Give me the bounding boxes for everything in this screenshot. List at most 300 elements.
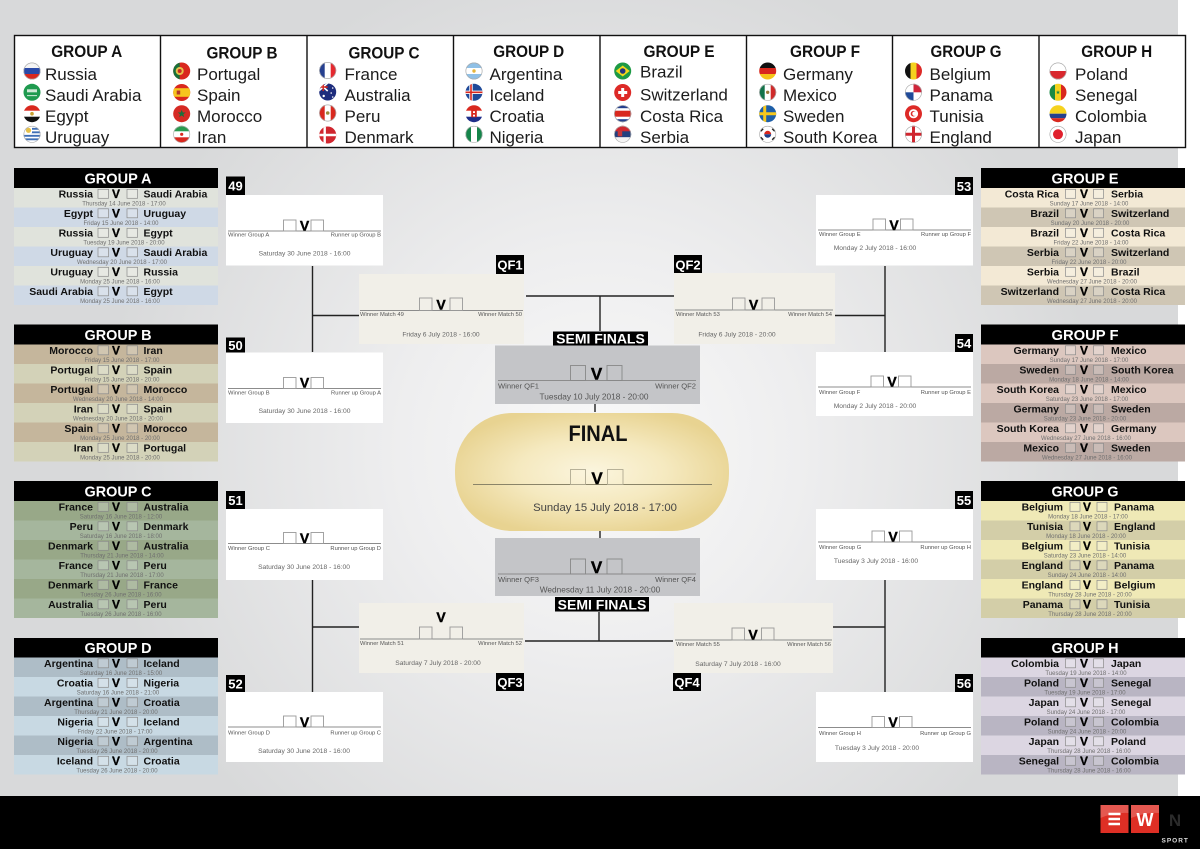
fixture: Peru v Denmark: Denmark: [144, 521, 189, 533]
panel: Group H fixtures: GROUP H: [1052, 640, 1118, 657]
semi final 2: [495, 538, 700, 612]
fixture: Colombia v Japan: Colombia: [1011, 658, 1059, 670]
fixture: Spain v Morocco: V: [112, 421, 120, 435]
fixture: Belgium v Tunisia: V: [1083, 539, 1091, 553]
logo: EWN Sport: W: [1136, 810, 1154, 830]
fixture: Uruguay v Saudi Arabia: V: [112, 245, 120, 259]
fixture: Portugal v Morocco: [14, 382, 218, 403]
fixture: Russia v Egypt: V: [112, 226, 120, 240]
fixture: Iran v Portugal: Monday 25 June 2018 - 20:00: [80, 456, 161, 462]
final: Sunday 15 July 2018 - 17:00: [533, 502, 677, 514]
fixture: Poland v Senegal: Poland: [1024, 678, 1059, 690]
fixture: Panama v Tunisia: V: [1083, 597, 1091, 611]
fixture: Brazil v Switzerland: Sunday 20 June 2018 - 20:00: [1051, 221, 1130, 227]
panel: Group C fixtures: [14, 481, 218, 618]
fixture: Costa Rica v Serbia: Sunday 17 June 2018 - 14:00: [1050, 202, 1129, 208]
fixture: Japan v Poland: V: [1080, 734, 1088, 748]
match 52: Winner Group D: [228, 730, 270, 736]
group list: Group H: GROUP H: [1081, 42, 1152, 61]
fixture: Japan v Senegal: Sunday 24 June 2018 - 17:00: [1047, 710, 1126, 716]
quarter final 4: Winner Match 55: [676, 642, 720, 648]
quarter final 4: Saturday 7 July 2018 - 16:00: [695, 661, 781, 668]
fixture: England v Belgium: Thursday 28 June 2018 - 20:00: [1048, 592, 1132, 598]
country: Senegal: Senegal: [1075, 86, 1137, 105]
fixture: Iceland v Croatia: Tuesday 26 June 2018 - 20:00: [76, 768, 158, 774]
fixture: Serbia v Switzerland: Serbia: [1027, 247, 1059, 259]
semi final 1: Winner QF2: [655, 382, 696, 390]
match 49: V: [300, 218, 310, 234]
fixture: France v Australia: V: [112, 500, 120, 514]
fixture: Serbia v Switzerland: Switzerland: [1111, 247, 1169, 259]
fixture: Australia v Peru: [14, 597, 218, 618]
fixture: France v Australia: Saturday 16 June 2018 - 12:00: [80, 514, 163, 520]
quarter final 2: Winner Match 53: [676, 312, 720, 318]
fixture: Germany v Sweden: Sweden: [1111, 404, 1151, 416]
fixture: Iceland v Croatia: V: [112, 754, 120, 768]
match 50: [226, 338, 383, 423]
fixture: Spain v Morocco: [14, 421, 218, 442]
fixture: Colombia v Japan: Japan: [1111, 658, 1141, 670]
fixture: Nigeria v Argentina: [14, 734, 218, 755]
group list: Group C: [319, 43, 420, 147]
country: Peru: Peru: [344, 107, 380, 126]
panel: Group F fixtures: GROUP F: [1052, 327, 1118, 344]
country: Brazil: Brazil: [640, 62, 683, 82]
match 52: 52: [228, 676, 243, 692]
fixture: Argentina v Iceland: [14, 656, 218, 677]
fixture: Japan v Poland: [981, 734, 1185, 755]
fixture: Serbia v Brazil: Wednesday 27 June 2018 - 20:00: [1047, 280, 1138, 286]
fixture: Argentina v Croatia: V: [112, 695, 120, 709]
fixture: Russia v Egypt: [14, 226, 218, 246]
panel: Group F fixtures: [981, 324, 1185, 462]
country: Denmark: Denmark: [344, 128, 414, 147]
match 49: Winner Group A: [228, 232, 269, 238]
fixture: Senegal v Colombia: Colombia: [1111, 756, 1159, 768]
quarter final 3: QF3: [497, 675, 523, 690]
fixture: Argentina v Croatia: Croatia: [144, 697, 180, 709]
fixture: Brazil v Switzerland: Brazil: [1030, 208, 1059, 220]
final: [455, 413, 729, 531]
fixture: Sweden v South Korea: Sweden: [1019, 364, 1059, 376]
panel: Group D fixtures: GROUP D: [84, 640, 152, 657]
final: FINAL: [568, 421, 628, 446]
match 55: Runner up Group H: [920, 545, 971, 551]
fixture: Iceland v Croatia: Croatia: [144, 756, 180, 768]
quarter final 2: V: [749, 296, 759, 312]
fixture: South Korea v Germany: South Korea: [997, 423, 1059, 435]
country: Russia: Russia: [45, 65, 98, 84]
fixture: Russia v Saudi Arabia: Saudi Arabia: [144, 188, 207, 200]
country: Poland: Poland: [1075, 65, 1128, 84]
quarter final 4: QF4: [674, 675, 700, 690]
group list: Group F: GROUP F: [790, 42, 860, 61]
fixture: Uruguay v Russia: Uruguay: [50, 266, 93, 278]
panel: Group A fixtures: GROUP A: [84, 170, 152, 188]
group list: Group F: [759, 42, 878, 147]
fixture: Portugal v Morocco: Wednesday 20 June 2018 - 14:00: [73, 397, 164, 403]
semi final 2: SEMI FINALS: [558, 596, 646, 612]
fixture: Nigeria v Iceland: Friday 22 June 2018 - 17:00: [77, 730, 153, 736]
fixture: Argentina v Croatia: Argentina: [44, 697, 93, 709]
fixture: South Korea v Mexico: [981, 382, 1185, 403]
fixture: Belgium v Panama: Panama: [1114, 502, 1154, 514]
semi final 2: V: [591, 558, 603, 577]
fixture: Mexico v Sweden: V: [1080, 441, 1088, 455]
fixture: Denmark v France: Tuesday 26 June 2018 - 16:00: [80, 592, 162, 598]
fixture: Belgium v Panama: V: [1083, 500, 1091, 514]
fixture: Australia v Peru: V: [112, 597, 120, 611]
match 52: Runner up Group C: [330, 730, 381, 736]
match 51: Winner Group C: [228, 546, 270, 552]
quarter final 1: Winner Match 49: [360, 312, 404, 318]
semi final 2: Winner QF4: [655, 575, 696, 584]
fixture: Senegal v Colombia: Senegal: [1019, 756, 1059, 768]
fixture: Peru v Denmark: Saturday 16 June 2018 - 18:00: [80, 534, 163, 540]
panel: Group E fixtures: GROUP E: [1052, 170, 1118, 188]
panel: Group C fixtures: GROUP C: [84, 484, 152, 500]
fixture: Serbia v Switzerland: V: [1080, 245, 1088, 259]
quarter final 4: Winner Match 56: [787, 642, 831, 648]
fixture: Mexico v Sweden: Mexico: [1023, 442, 1059, 454]
group list: Group G: GROUP G: [930, 42, 1002, 61]
quarter final 1: [359, 255, 524, 344]
country: Tunisia: Tunisia: [930, 107, 984, 126]
fixture: Portugal v Spain: [14, 363, 218, 384]
fixture: Russia v Saudi Arabia: Thursday 14 June 2018 - 17:00: [82, 202, 166, 208]
fixture: Costa Rica v Serbia: Costa Rica: [1005, 188, 1059, 200]
fixture: Denmark v France: [14, 578, 218, 598]
fixture: Switzerland v Costa Rica: [981, 284, 1185, 305]
fixture: France v Australia: [14, 500, 218, 520]
panel: Group D fixtures: [14, 638, 218, 774]
fixture: Belgium v Tunisia: Saturday 23 June 2018 - 14:00: [1044, 554, 1127, 560]
fixture: Japan v Poland: Thursday 28 June 2018 - 16:00: [1047, 749, 1131, 755]
fixture: Costa Rica v Serbia: Serbia: [1111, 188, 1143, 200]
quarter final 2: [674, 255, 835, 344]
fixture: Saudi Arabia v Egypt: [14, 284, 218, 305]
fixture: Serbia v Switzerland: Friday 22 June 2018 - 20:00: [1051, 260, 1127, 266]
fixture: England v Belgium: England: [1022, 580, 1063, 592]
fixture: Argentina v Croatia: [14, 695, 218, 716]
fixture: Uruguay v Saudi Arabia: Uruguay: [50, 247, 93, 259]
logo: EWN Sport: N: [1169, 811, 1181, 830]
fixture: Panama v Tunisia: Thursday 28 June 2018 - 20:00: [1048, 612, 1132, 618]
fixture: Belgium v Tunisia: [981, 539, 1185, 560]
fixture: France v Australia: France: [59, 502, 93, 514]
fixture: England v Belgium: [981, 578, 1185, 598]
match 51: Runner up Group D: [330, 546, 381, 552]
fixture: Germany v Mexico: Sunday 17 June 2018 - 17:00: [1050, 358, 1129, 364]
fixture: Iceland v Croatia: [14, 754, 218, 774]
fixture: Sweden v South Korea: Monday 18 June 2018 - 14:00: [1049, 378, 1130, 384]
country: Panama: Panama: [930, 86, 993, 105]
fixture: Uruguay v Russia: [14, 265, 218, 286]
fixture: Spain v Morocco: Monday 25 June 2018 - 20:00: [80, 436, 161, 442]
fixture: Serbia v Switzerland: [981, 245, 1185, 266]
fixture: Tunisia v England: V: [1083, 519, 1091, 533]
country: England: England: [930, 128, 992, 147]
fixture: Germany v Mexico: V: [1080, 343, 1088, 357]
fixture: Brazil v Costa Rica: Brazil: [1030, 228, 1059, 240]
fixture: Panama v Tunisia: [981, 597, 1185, 618]
fixture: Nigeria v Iceland: Nigeria: [57, 716, 93, 728]
group list: Group D: [465, 42, 564, 147]
fixture: England v Belgium: Belgium: [1114, 580, 1155, 592]
group list: Group G: [904, 42, 1002, 147]
fixture: Uruguay v Russia: Monday 25 June 2018 - 16:00: [80, 280, 161, 286]
fixture: Russia v Egypt: Russia: [59, 228, 93, 240]
fixture: Tunisia v England: Tunisia: [1027, 521, 1063, 533]
logo: EWN Sport: [1100, 805, 1189, 844]
fixture: Argentina v Croatia: Thursday 21 June 2018 - 20:00: [74, 710, 158, 716]
fixture: Japan v Senegal: [981, 695, 1185, 716]
fixture: Iran v Spain: Wednesday 20 June 2018 - 20:00: [73, 416, 164, 422]
fixture: Argentina v Iceland: Saturday 16 June 2018 - 15:00: [80, 671, 163, 677]
fixture: Egypt v Uruguay: Egypt: [64, 208, 93, 220]
fixture: Iran v Spain: V: [112, 402, 120, 416]
fixture: Saudi Arabia v Egypt: Saudi Arabia: [29, 286, 93, 298]
fixture: Uruguay v Saudi Arabia: [14, 245, 218, 266]
quarter final 3: Winner Match 51: [360, 641, 404, 647]
fixture: Poland v Colombia: Colombia: [1111, 716, 1159, 728]
semi final 1: Winner QF1: [498, 382, 539, 390]
group list: Group C: GROUP C: [348, 43, 420, 62]
fixture: Portugal v Spain: Spain: [144, 364, 172, 376]
fixture: Colombia v Japan: V: [1080, 656, 1088, 670]
final: V: [591, 469, 603, 488]
fixture: Nigeria v Argentina: V: [112, 734, 120, 748]
match 54: Monday 2 July 2018 - 20:00: [834, 403, 917, 410]
fixture: Brazil v Switzerland: V: [1080, 206, 1088, 220]
country: Belgium: Belgium: [930, 65, 991, 84]
fixture: Belgium v Tunisia: Belgium: [1022, 540, 1063, 552]
fixture: Iran v Portugal: Portugal: [144, 442, 186, 454]
match 52: V: [300, 714, 310, 730]
fixture: Belgium v Tunisia: Tunisia: [1114, 540, 1150, 552]
country: Sweden: Sweden: [783, 107, 844, 126]
match 50: V: [300, 374, 310, 390]
match 53: 53: [957, 179, 971, 194]
quarter final 1: Friday 6 July 2018 - 16:00: [402, 332, 480, 338]
fixture: Senegal v Colombia: V: [1080, 754, 1088, 768]
fixture: Peru v Denmark: Peru: [70, 521, 93, 533]
fixture: Sweden v South Korea: V: [1080, 363, 1088, 377]
semi final 2: Winner QF3: [498, 575, 539, 584]
fixture: Iran v Spain: Spain: [144, 404, 172, 416]
fixture: South Korea v Germany: Wednesday 27 June 2018 - 16:00: [1041, 436, 1132, 442]
fixture: Belgium v Panama: [981, 500, 1185, 520]
match 49: 49: [228, 178, 243, 194]
fixture: Croatia v Nigeria: Croatia: [57, 678, 93, 690]
fixture: Russia v Egypt: Tuesday 19 June 2018 - 20:00: [83, 240, 165, 246]
country: Iran: Iran: [197, 128, 226, 147]
match 51: V: [300, 530, 310, 546]
fixture: Russia v Saudi Arabia: [14, 187, 218, 208]
fixture: Panama v Tunisia: Tunisia: [1114, 599, 1150, 611]
fixture: Denmark v France: Denmark: [48, 580, 93, 592]
fixture: Senegal v Colombia: Thursday 28 June 2018 - 16:00: [1047, 768, 1131, 774]
fixture: Portugal v Spain: V: [112, 363, 120, 377]
fixture: Costa Rica v Serbia: [981, 187, 1185, 208]
quarter final 1: V: [436, 296, 446, 312]
fixture: Japan v Poland: Japan: [1029, 736, 1059, 748]
footer bar: [0, 796, 1200, 849]
match 55: Winner Group G: [819, 545, 862, 551]
fixture: Russia v Egypt: Egypt: [144, 228, 173, 240]
logo: EWN Sport: SPORT: [1162, 838, 1189, 844]
match 54: [816, 334, 973, 416]
fixture: South Korea v Mexico: V: [1080, 382, 1088, 396]
quarter final 3: Saturday 7 July 2018 - 20:00: [395, 660, 481, 667]
fixture: Serbia v Brazil: [981, 265, 1185, 286]
fixture: Brazil v Switzerland: Switzerland: [1111, 208, 1169, 220]
fixture: South Korea v Germany: Germany: [1111, 423, 1157, 435]
fixture: Mexico v Sweden: Wednesday 27 June 2018 - 16:00: [1042, 456, 1133, 462]
fixture: Serbia v Brazil: V: [1080, 265, 1088, 279]
country: Saudi Arabia: Saudi Arabia: [45, 86, 142, 105]
fixture: Egypt v Uruguay: Friday 15 June 2018 - 14:00: [83, 221, 159, 227]
country: Spain: Spain: [197, 86, 240, 105]
semi final 2: Wednesday 11 July 2018 - 20:00: [540, 584, 661, 594]
fixture: Croatia v Nigeria: Nigeria: [144, 678, 179, 690]
fixture: Nigeria v Argentina: Nigeria: [57, 736, 93, 748]
fixture: France v Peru: Peru: [144, 560, 167, 572]
fixture: Denmark v Australia: Thursday 21 June 2018 - 14:00: [80, 554, 164, 560]
fixture: Colombia v Japan: [981, 656, 1185, 677]
fixture: Brazil v Costa Rica: Costa Rica: [1111, 228, 1165, 240]
country: Mexico: Mexico: [783, 86, 837, 105]
fixture: England v Belgium: V: [1083, 578, 1091, 592]
fixture: Tunisia v England: England: [1114, 521, 1155, 533]
country: Egypt: Egypt: [45, 107, 89, 126]
fixture: France v Peru: V: [112, 558, 120, 572]
fixture: Germany v Sweden: [981, 402, 1185, 422]
fixture: Croatia v Nigeria: [14, 676, 218, 696]
fixture: Denmark v Australia: [14, 539, 218, 560]
quarter final 3: V: [436, 609, 446, 625]
fixture: France v Peru: [14, 558, 218, 579]
fixture: Australia v Peru: Peru: [144, 599, 167, 611]
fixture: Saudi Arabia v Egypt: Monday 25 June 2018 - 16:00: [80, 299, 161, 305]
fixture: Nigeria v Iceland: [14, 715, 218, 736]
fixture: England v Panama: Sunday 24 June 2018 - 14:00: [1048, 573, 1127, 579]
fixture: Germany v Sweden: Germany: [1013, 404, 1059, 416]
fixture: Nigeria v Iceland: Iceland: [144, 716, 180, 728]
fixture: Japan v Senegal: Japan: [1029, 697, 1059, 709]
fixture: South Korea v Germany: V: [1080, 421, 1088, 435]
fixture: Uruguay v Russia: V: [112, 265, 120, 279]
fixture: Argentina v Iceland: Iceland: [144, 658, 180, 670]
group list: Group A: GROUP A: [51, 42, 122, 61]
fixture: Russia v Saudi Arabia: Russia: [59, 188, 93, 200]
fixture: Brazil v Costa Rica: [981, 226, 1185, 246]
match 50: Runner up Group A: [331, 390, 381, 396]
match 49: Saturday 30 June 2018 - 16:00: [259, 250, 351, 258]
fixture: Germany v Sweden: V: [1080, 402, 1088, 416]
semi final 1: V: [591, 364, 603, 384]
fixture: Russia v Saudi Arabia: V: [112, 187, 120, 201]
fixture: Germany v Mexico: [981, 343, 1185, 364]
fixture: Sweden v South Korea: [981, 363, 1185, 384]
fixture: Senegal v Colombia: [981, 754, 1185, 774]
fixture: Spain v Morocco: Morocco: [144, 423, 187, 435]
fixture: Denmark v France: France: [144, 580, 178, 592]
fixture: Nigeria v Iceland: V: [112, 715, 120, 729]
fixture: Brazil v Costa Rica: Friday 22 June 2018 - 14:00: [1053, 240, 1129, 246]
fixture: Iran v Portugal: V: [112, 441, 120, 455]
fixture: Poland v Colombia: V: [1080, 715, 1088, 729]
match 50: 50: [228, 338, 243, 353]
panel: Group B fixtures: [14, 324, 218, 462]
fixture: Japan v Senegal: V: [1080, 695, 1088, 709]
fixture: England v Panama: V: [1083, 558, 1091, 572]
fixture: Morocco v Iran: Friday 15 June 2018 - 17:00: [84, 358, 160, 364]
match 54: Runner up Group E: [921, 390, 971, 396]
country: Portugal: Portugal: [197, 65, 260, 84]
fixture: Uruguay v Saudi Arabia: Wednesday 20 June 2018 - 17:00: [77, 260, 168, 266]
fixture: Portugal v Spain: Friday 15 June 2018 - 20:00: [84, 378, 160, 384]
country: Costa Rica: Costa Rica: [640, 107, 724, 126]
fixture: Australia v Peru: Tuesday 26 June 2018 - 16:00: [80, 612, 162, 618]
group list: Group B: [173, 43, 278, 147]
match 55: V: [888, 528, 898, 544]
fixture: Iran v Portugal: [14, 441, 218, 462]
fixture: Nigeria v Argentina: Argentina: [144, 736, 193, 748]
country: Nigeria: Nigeria: [490, 128, 544, 147]
panel: Group G fixtures: [981, 481, 1185, 618]
panel: Group E fixtures: [981, 168, 1185, 305]
fixture: Japan v Senegal: Senegal: [1111, 697, 1151, 709]
fixture: Serbia v Brazil: Serbia: [1027, 266, 1059, 278]
match 53: Winner Group E: [819, 232, 861, 238]
group list: Group A: [23, 42, 142, 147]
match 55: Tuesday 3 July 2018 - 16:00: [834, 558, 918, 565]
country: Iceland: Iceland: [490, 86, 544, 105]
fixture: Poland v Colombia: [981, 715, 1185, 736]
fixture: Japan v Poland: Poland: [1111, 736, 1146, 748]
match 49: [226, 176, 383, 266]
fixture: Australia v Peru: Australia: [48, 599, 93, 611]
panel: group draw table: [14, 36, 1186, 148]
match 56: Runner up Group G: [920, 731, 971, 737]
semi final 1: [495, 330, 700, 404]
match 50: Winner Group B: [228, 390, 270, 396]
group list: Group E: GROUP E: [644, 42, 714, 61]
match 54: Winner Group F: [819, 390, 861, 396]
fixture: Colombia v Japan: Tuesday 19 June 2018 - 14:00: [1045, 671, 1127, 677]
fixture: Denmark v Australia: Denmark: [48, 540, 93, 552]
fixture: Uruguay v Russia: Russia: [144, 266, 178, 278]
match 52: Saturday 30 June 2018 - 16:00: [258, 748, 350, 755]
fixture: Croatia v Nigeria: V: [112, 676, 120, 690]
fixture: Morocco v Iran: [14, 343, 218, 364]
quarter final 4: [673, 603, 833, 691]
country: Japan: Japan: [1075, 128, 1121, 147]
match 50: Saturday 30 June 2018 - 16:00: [259, 408, 351, 415]
fixture: Panama v Tunisia: Panama: [1023, 599, 1063, 611]
match 56: Winner Group H: [819, 731, 861, 737]
fixture: Poland v Senegal: [981, 676, 1185, 696]
country: France: France: [344, 65, 397, 84]
match 56: V: [888, 714, 898, 730]
fixture: Germany v Mexico: Mexico: [1111, 345, 1147, 357]
fixture: Portugal v Morocco: Portugal: [50, 384, 93, 396]
fixture: South Korea v Mexico: South Korea: [997, 384, 1059, 396]
fixture: Peru v Denmark: [14, 519, 218, 540]
fixture: France v Australia: Australia: [144, 502, 189, 514]
fixture: Brazil v Costa Rica: V: [1080, 226, 1088, 240]
